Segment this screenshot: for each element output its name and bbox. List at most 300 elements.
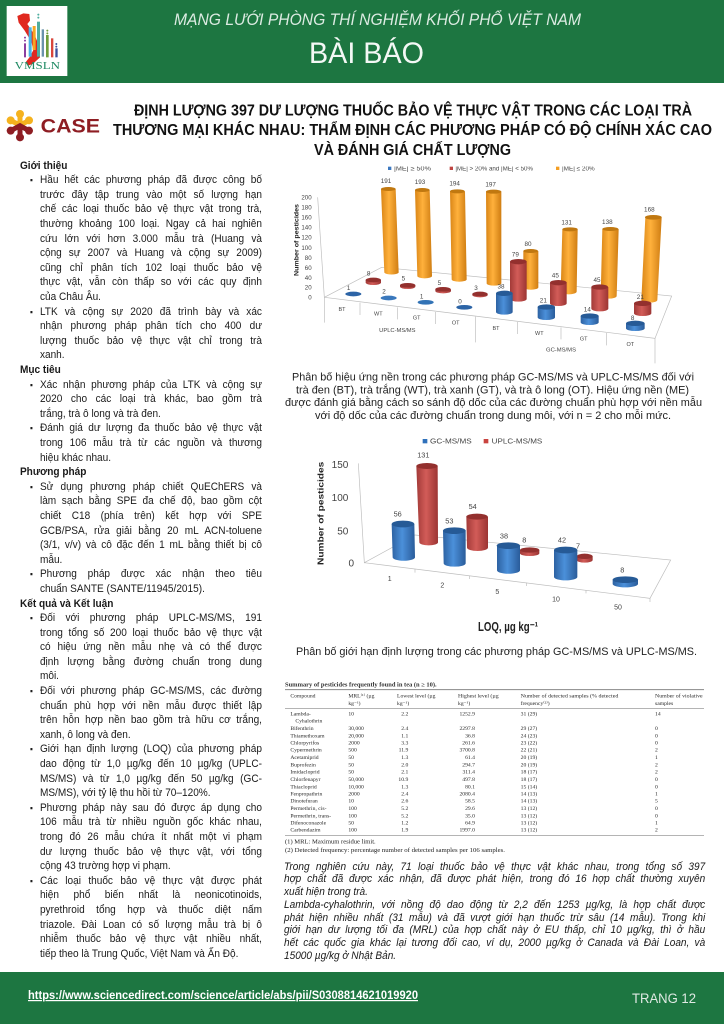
table: lowest level values: 1.3 [401, 755, 408, 761]
table: detected samples values: 18 (17) [521, 776, 537, 783]
table: compound names: Thiacloprid [290, 784, 317, 790]
table: detected samples values: 20 (19) [521, 762, 537, 769]
x axis labels [388, 576, 622, 611]
bullet: UPLC results: có hiệu ứng nền mẫu nhẹ và có thể được [40, 641, 262, 653]
caption: matrix effect chart: với độ dốc của các đường chuẩn trong dung môi, với n = 2 cho mỗi mức. [315, 409, 671, 422]
table header: kg⁻¹) [458, 700, 470, 707]
bullet: common pesticides: Các loại thuốc bảo vệ thực vật được phát [40, 875, 262, 887]
x axis labels: 50 [614, 604, 622, 611]
bullet: QuEChERS: chiết C18 (phía trên) kết hợp với SPE [40, 510, 262, 522]
footer band [0, 972, 724, 1024]
table: MRL values: 10,000 [348, 784, 364, 790]
table: lowest level values [398, 712, 408, 834]
caption: matrix effect chart: trà đen (BT), trà trắng (WT), trà xanh (GT), và trà ô long (OT). Hiệu ứng nền (ME) [296, 384, 689, 396]
y axis labels: 20 [305, 285, 312, 292]
table footnotes: (1) MRL: Maximum residue limit. [285, 839, 376, 846]
table: detected samples values: 23 (22) [521, 740, 537, 747]
table: MRL values: 10 [348, 712, 354, 718]
source link: https://www.sciencedirect.com/science/article/abs/pii/S0308814621019920 [28, 988, 418, 1002]
table: highest level values: 294.7 [462, 763, 475, 769]
orange cylinders [381, 187, 662, 303]
table: detected samples values: 22 (21) [521, 747, 537, 754]
table: detected samples values: 13 (12) [521, 812, 537, 819]
left column text: ▪ [30, 175, 33, 185]
left column text: ▪ [30, 482, 33, 492]
x axis labels: 1 [388, 576, 392, 583]
table: highest level values: 58.5 [465, 799, 475, 805]
data value labels: 21 [637, 294, 644, 301]
italic findings paragraph: giới hạn dư lượng tối đa (MRL) của hợp chất này ở EU thấp, chỉ 10 µg/kg, thì ở hầu [284, 924, 705, 936]
blue cylinders [345, 291, 645, 331]
data value labels: 3 [474, 285, 478, 292]
bullet: earlier methods: cộng sự 2007 và Huang và cộng sự 2009) [40, 247, 262, 259]
table: lowest level values: 2.4 [401, 792, 408, 798]
table: violative samples values: 2 [655, 770, 658, 776]
bullet: UPLC results: Đối với phương pháp UPLC-MS/MS, 191 [40, 612, 262, 624]
chart legend: |ME| ≤ 20% [562, 167, 595, 173]
table header: MRL⁽¹⁾ (µg [348, 693, 375, 700]
table: violative samples values: 0 [655, 813, 658, 819]
data value labels: 131 [561, 219, 572, 226]
icon: CASE logo: CASE [41, 117, 100, 138]
table: lowest level values: 2.6 [401, 799, 408, 805]
table: detected samples values: 14 (13) [521, 798, 537, 805]
article title [113, 101, 712, 159]
left column text: ▪ [30, 876, 33, 886]
data value labels: 7 [576, 541, 580, 550]
table: MRL values: 10 [348, 799, 354, 805]
x axis labels: GT [580, 337, 588, 343]
bullet: GC results: trên hỗn hợp nền bao gồm trà hữu cơ trắng, [40, 714, 262, 726]
left column text: ▪ [30, 380, 33, 390]
table: compound names: Permethrin, trans- [290, 813, 331, 819]
table: violative samples values: 0 [655, 726, 658, 732]
data value labels: 1 [420, 294, 424, 301]
bullet: earlier methods: thực vật, vẫn còn thấp so với các quy định [40, 276, 262, 288]
bullet: common pesticides [30, 875, 262, 960]
table: violative samples values: 1 [655, 792, 658, 798]
table: highest level values: 311.4 [462, 770, 475, 776]
y axis title: Number of pesticides [316, 461, 326, 565]
table header: kg⁻¹) [348, 700, 361, 707]
table: detected samples values: 13 (12) [521, 805, 537, 812]
bullet: UPLC results: trong tổng số 200 loại thuốc bảo vệ thực vật [40, 627, 262, 639]
heading: introduction: Giới thiệu [20, 160, 67, 172]
y axis labels: 50 [337, 526, 349, 537]
bullet: common pesticides: pyrethroid tổng hợp và thuốc diệt nấm [40, 904, 262, 916]
table: highest level values: 80.1 [465, 784, 475, 790]
x axis labels: OT [627, 342, 635, 348]
data value labels: 45 [552, 272, 559, 279]
table header: frequency⁽²⁾) [521, 700, 550, 707]
caption: matrix effect chart: Phân bố hiệu ứng nền trong các phương pháp GC-MS/MS và UPLC-MS/MS đối với [292, 372, 694, 384]
data value labels: 5 [438, 280, 442, 287]
bullet: 106 samples: trong đó 26 mẫu chứa ít nhất một vi phạm [40, 831, 262, 843]
y axis labels: 140 [301, 224, 312, 231]
bullet: validate method: 2020 cho các loại trà khác, bao gồm trà [40, 393, 262, 405]
table: violative samples values: 14 [655, 712, 661, 718]
bullet: common pesticides: tiếp theo là Trung Quốc, Việt Nam và Ấn Độ. [40, 948, 238, 960]
table: MRL values: 20,000 [348, 733, 364, 739]
table: MRL values: 2000 [348, 741, 360, 747]
bullet: evaluate residues [30, 422, 262, 464]
table: detected samples values: 13 (12) [521, 827, 537, 834]
table: lowest level values: 10.9 [398, 777, 408, 783]
bullet: QuEChERS: làm sạch bằng SPE đa chế độ, bao gồm cột [40, 495, 262, 507]
table: highest level values: 2080.4 [459, 792, 475, 798]
table: compound names: Imidacloprid [290, 770, 320, 776]
table: detected samples values: 15 (14) [521, 783, 537, 790]
table: MRL values [348, 712, 364, 834]
bullet: LOQ [30, 743, 262, 799]
table: compound names: Thiamethoxam [290, 733, 325, 739]
data value labels: 197 [485, 181, 496, 188]
table: lowest level values: 11.9 [399, 748, 408, 754]
data value labels: 8 [522, 535, 526, 544]
bullet: LTK 2020: xanh. [40, 349, 65, 361]
chart legend: |ME| ≥ 50% [394, 167, 432, 173]
table: violative samples values: 0 [655, 806, 658, 812]
bullet: earlier methods [30, 174, 262, 303]
x axis labels: GT [413, 316, 421, 322]
table: compound names: Difenoconazole [290, 819, 327, 826]
table: violative samples values: 2 [655, 763, 658, 769]
header title: BÀI BÁO [309, 37, 424, 70]
bullet: common pesticides: triazole. Đài Loan có số lượng mẫu trà bị ô [40, 919, 262, 931]
table: lowest level values: 2.4 [401, 726, 408, 732]
heading: objectives: Mục tiêu [20, 364, 61, 376]
data value labels: 14 [584, 306, 591, 313]
table header: kg⁻¹) [397, 700, 409, 707]
chart axes and floor [318, 197, 672, 363]
left column text: ▪ [30, 307, 33, 317]
table: highest level values [459, 712, 475, 834]
bullet: GC results: Đối với phương pháp GC-MS/MS, các đường [40, 685, 262, 697]
chart axes and floor [358, 463, 671, 602]
bullet: QuEChERS [30, 481, 262, 566]
bullet: UPLC results: môi. [40, 670, 59, 682]
bullet: earlier methods: cũng chỉ phân tích 102 loại thuốc bảo vệ [40, 262, 262, 274]
data value labels: 56 [394, 509, 402, 518]
italic findings paragraph [284, 861, 706, 962]
bullet: common pesticides: nhiễm thuốc bảo vệ thực vật nhiều nhất, [40, 933, 262, 945]
table: MRL values: 50 [348, 763, 354, 769]
table header: Lowest level (µg [397, 693, 436, 700]
table: MRL values: 50 [348, 770, 354, 776]
table: lowest level values: 5.2 [401, 806, 408, 812]
bullet: LTK 2020: lượng thuốc bảo vệ thực vật chỉ trong trà [40, 335, 262, 347]
header band [0, 0, 724, 83]
left column text: ▪ [30, 423, 33, 433]
bullet: UPLC results: định lượng bằng đường chuẩn trong dung [40, 656, 262, 668]
x axis labels: WT [374, 311, 383, 317]
table: highest level values: 2297.8 [459, 726, 475, 732]
bullet: evaluate residues: Đánh giá dư lượng đa thuốc bảo vệ thực vật [40, 422, 262, 434]
data value labels: 1 [347, 285, 351, 292]
bullet: earlier methods: cứu lớn với hơn 3.000 mẫu trà (Huang và [40, 233, 262, 245]
data value labels: 45 [593, 277, 601, 284]
bullet: LTK 2020: LTK và cộng sự 2020 đã trình bày và xác [40, 306, 262, 318]
table header: Compound [290, 694, 316, 700]
table: compound names: Buprofezin [290, 762, 316, 769]
table: compound names: Lambda- [290, 712, 311, 718]
bullet: LOQ: MS/MS), với tỷ lệ thu hồi từ 70–120%. [40, 787, 211, 799]
data value labels: 54 [469, 502, 477, 511]
y axis labels: 160 [301, 214, 312, 221]
bullet: SANTE [30, 568, 262, 595]
bullet: earlier methods: trước đây tập trung vào một số lượng hạn [40, 189, 262, 201]
table: compound names: Chlorfenapyr [290, 776, 321, 783]
table: compound names [290, 712, 331, 834]
table: detected samples values: 18 (17) [521, 769, 537, 776]
table: detected samples values [521, 711, 537, 834]
bullet: 106 samples: cộng 43 trường hợp vi phạm. [40, 860, 171, 872]
table: compound names: Cyhalothrin [295, 719, 323, 725]
table: compound names: Acetamiprid [290, 755, 319, 761]
table: violative samples values: 0 [655, 784, 658, 790]
table header: Highest level (µg [458, 693, 499, 700]
italic findings paragraph: Trong nghiên cứu này, 71 loại thuốc bảo vệ thực vật khác nhau, trong tổng số 397 [284, 861, 705, 873]
bullet: QuEChERS: (3/1, v/v) và cô đặc đến 1 mL bằng thiết bị cô [40, 539, 262, 551]
table: highest level values: 64.9 [465, 820, 475, 826]
bullet: validate method [30, 379, 262, 420]
table: MRL values: 100 [348, 813, 357, 819]
table: highest level values: 61.4 [465, 755, 475, 761]
data value labels: 80 [524, 241, 532, 248]
data value labels: 79 [512, 251, 519, 258]
data value labels: 8 [631, 315, 635, 322]
table: detected samples values: 24 (23) [521, 732, 537, 739]
y axis title: Number of pesticides [293, 203, 300, 276]
bullet: QuEChERS: mẫu. [40, 554, 62, 566]
icon: VMSLN logo: VMSLN [15, 61, 61, 72]
x axis labels: GC-MS/MS [546, 348, 576, 354]
left column text: ▪ [30, 569, 33, 579]
data value labels: 21 [540, 298, 547, 305]
table: lowest level values: 1.9 [401, 828, 408, 834]
x axis labels: BT [338, 307, 346, 313]
bullet: SANTE: Phương pháp được xác nhận theo tiêu [40, 568, 262, 580]
data value labels [347, 178, 655, 322]
y axis labels: 40 [305, 275, 312, 282]
table: violative samples values: 5 [655, 799, 658, 805]
table: lowest level values: 5.2 [401, 813, 408, 819]
table: lowest level values: 3.3 [401, 741, 408, 747]
table: lowest level values: 2.1 [401, 770, 408, 776]
table: MRL values: 500 [348, 748, 357, 754]
chart: matrix effect 3D cylinders [293, 166, 672, 364]
left column text [20, 160, 262, 960]
caption: LOQ chart: Phân bố giới hạn định lượng trong các phương pháp GC-MS/MS và UPLC-MS/MS. [296, 646, 697, 658]
table: compound names: Cypermethrin [290, 748, 322, 754]
chart legend: UPLC-MS/MS [492, 437, 542, 446]
y axis labels: 120 [301, 235, 312, 242]
x axis labels [338, 307, 635, 354]
x axis labels: BT [492, 326, 500, 332]
header organisation name: MẠNG LƯỚI PHÒNG THÍ NGHIỆM KHỐI PHỔ VIỆT NAM [174, 10, 581, 29]
x axis labels: 2 [440, 583, 444, 590]
bullet: evaluate residues: trong 106 mẫu trà từ các nguồn và thương [40, 437, 262, 449]
table: MRL values: 50 [348, 755, 354, 761]
bullet: evaluate residues: hiệu khác nhau. [40, 452, 111, 464]
page number: TRANG 12 [632, 991, 696, 1006]
bullet: 106 samples: Phương pháp này sau đó được áp dụng cho [40, 802, 262, 814]
heading: results and conclusion: Kết quả và Kết luận [20, 598, 113, 610]
y axis labels: 80 [305, 255, 312, 262]
y axis labels: 0 [348, 558, 354, 569]
table: highest level values: 35.0 [465, 813, 475, 819]
table: MRL values: 100 [348, 828, 357, 834]
y axis labels [301, 194, 312, 301]
table: violative samples values [655, 712, 661, 834]
table rules [285, 690, 704, 835]
table: highest level values: 1252.9 [459, 712, 475, 718]
bullet: UPLC results [30, 612, 262, 682]
table: violative samples values: 0 [655, 777, 658, 783]
data value labels: 8 [620, 565, 624, 574]
table: violative samples values: 1 [655, 820, 658, 826]
y axis labels: 60 [305, 265, 312, 272]
data value labels: 131 [417, 451, 429, 460]
y axis labels: 150 [332, 460, 349, 471]
bullet: common pesticides: hiện phổ biến nhất là neonicotinoids, [40, 889, 262, 901]
bullet: validate method: Xác nhận phương pháp của LTK và cộng sự [40, 379, 262, 391]
chart legend: |ME| > 20% and |ME| < 50% [455, 167, 534, 173]
heading: method: Phương pháp [20, 466, 86, 478]
icon: CASE logo [6, 110, 100, 142]
x axis labels: UPLC-MS/MS [379, 328, 416, 334]
italic findings paragraph: Lambda-cyhalothrin, với nồng độ dao động từ 2,2 đến 1253 µg/kg, là hợp chất được [284, 899, 705, 911]
bullet: GC results: xanh, ô long và đen. [40, 729, 131, 741]
table header: Number of violative [655, 693, 703, 700]
data value labels: 191 [381, 178, 392, 185]
table: compound names: Bifenthrin [290, 725, 314, 732]
bullet: 106 samples [30, 802, 262, 872]
table: highest level values: 497.8 [462, 777, 475, 783]
table: lowest level values: 1.2 [401, 820, 408, 826]
table: pesticides frequently found [285, 682, 704, 854]
table: highest level values: 261.6 [462, 741, 475, 747]
bullet: QuEChERS: Sử dụng phương pháp chiết QuEChERS và [40, 481, 262, 493]
y axis labels: 100 [301, 245, 312, 252]
table: detected samples values: 13 (12) [521, 819, 537, 826]
data value labels [394, 451, 624, 574]
data value labels: 2 [382, 288, 386, 295]
y axis labels: 0 [308, 294, 312, 301]
left column text: ▪ [30, 686, 33, 696]
table: violative samples values: 2 [655, 748, 658, 754]
table: MRL values: 30,000 [348, 726, 364, 732]
table: compound names: Dinotefuran [290, 798, 318, 805]
bullet: earlier methods: chế các loại thuốc bảo vệ thực vật trong trà, [40, 203, 262, 215]
bullet: LOQ: dao động từ 1,0 µg/kg đến 10 µg/kg (UPLC- [40, 758, 262, 770]
x axis title: LOQ: LOQ, µg kg⁻¹ [478, 620, 538, 634]
left column text: ▪ [30, 744, 33, 754]
data value labels: 5 [402, 276, 406, 283]
y axis labels [332, 460, 354, 569]
table: MRL values: 50 [348, 820, 354, 826]
table footnotes: (2) Detected frequency: percentage number of detected samples per 106 samples. [285, 847, 506, 854]
table: MRL values: 50,000 [348, 777, 364, 783]
data value labels: 193 [415, 179, 426, 186]
left column text: ▪ [30, 613, 33, 623]
table title: Summary of pesticides frequently found in tea (n ≥ 10). [285, 682, 437, 689]
bullet: earlier methods: thường khoảng 100 loại. Ngay cả hai nghiên [40, 218, 262, 230]
italic findings paragraph: 15000 µg/kg ở Nhật Bản. [284, 950, 396, 962]
bullet: earlier methods: của Châu Âu. [40, 291, 101, 303]
table: compound names: Carbendazim [290, 828, 321, 834]
table: violative samples values: 1 [655, 755, 658, 761]
left column text: ▪ [30, 803, 33, 813]
y axis labels: 180 [301, 204, 312, 211]
table: compound names: Fenpropathrin [290, 792, 323, 798]
table: compound names: Permethrin, cis- [290, 806, 327, 812]
bullet: SANTE: chuẩn SANTE (SANTE/11945/2015). [40, 583, 205, 595]
red cylinders [366, 259, 651, 316]
table: highest level values: 1997.0 [459, 828, 475, 834]
chart legend [423, 437, 542, 446]
y axis labels: 200 [301, 194, 312, 201]
table: highest level values: 29.6 [465, 806, 475, 812]
data value labels: 38 [497, 284, 505, 291]
table: detected samples values: 14 (13) [521, 791, 537, 798]
bullet: QuEChERS: GCB/PSA, rửa giải bằng 20 mL ACN-toluene [40, 525, 262, 537]
table: MRL values: 100 [348, 806, 357, 812]
bullet: LOQ: Giới hạn định lượng (LOQ) của phương pháp [40, 743, 262, 755]
table: compound names: Chlorpyrifos [290, 740, 319, 747]
bullet: validate method: trắng, trà ô long và trà đen. [40, 408, 161, 420]
bullet: LTK 2020: nhận phương pháp phân tích cho 400 dư [40, 320, 262, 332]
bullet: 106 samples: dư lượng thuốc bảo vệ thực vật, với tổng [40, 846, 262, 858]
table header: Number of detected samples (% detected [521, 693, 619, 700]
table: lowest level values: 2.2 [401, 712, 408, 718]
x axis labels: OT [452, 320, 460, 326]
italic findings paragraph: hết các quốc gia khác lại tương đối cao, ví dụ, 2000 µg/kg ở Canada và Đài Loan, và [284, 937, 705, 949]
bullet: 106 samples: 106 mẫu trà từ nhiều nguồn gốc khác nhau, [40, 816, 262, 828]
blue cylinders [392, 521, 638, 587]
chart legend [388, 167, 595, 173]
data value labels: 194 [449, 181, 460, 188]
table: violative samples values: 0 [655, 733, 658, 739]
x axis labels: 5 [495, 589, 499, 596]
chart: LOQ distribution 3D cylinders [316, 437, 671, 611]
table: detected samples values: 31 (29) [521, 711, 537, 718]
table: detected samples values: 20 (19) [521, 754, 537, 761]
article title: VÀ ĐÁNH GIÁ CHẤT LƯỢNG [314, 142, 511, 159]
data value labels: 38 [500, 532, 508, 541]
italic findings paragraph: xuất hiện trong trà. [284, 886, 368, 898]
bullet: earlier methods: Hầu hết các phương pháp đã được công bố [40, 174, 262, 186]
data value labels: 0 [458, 299, 462, 306]
table: lowest level values: 1.1 [401, 733, 408, 739]
table header [290, 693, 703, 707]
table: violative samples values: 0 [655, 741, 658, 747]
icon: VMSLN logo [6, 6, 68, 76]
table: highest level values: 3700.8 [459, 748, 475, 754]
data value labels: 138 [602, 219, 613, 226]
table: lowest level values: 1.3 [401, 784, 408, 790]
bullet: LTK 2020 [30, 306, 262, 361]
caption: matrix effect chart: được đánh giá bằng cách so sánh độ dốc của các đường chuẩn phù hợp với nền mẫu [285, 396, 702, 409]
table: highest level values: 36.8 [465, 733, 475, 739]
article title: ĐỊNH LƯỢNG 397 DƯ LƯỢNG THUỐC BẢO VỆ THỰC VẬT TRONG CÁC LOẠI TRÀ [134, 102, 692, 120]
table: detected samples values: 29 (27) [521, 725, 537, 732]
caption: matrix effect chart [285, 372, 702, 422]
table header: samples [655, 701, 673, 707]
x axis labels: WT [535, 331, 544, 337]
table footnotes [285, 839, 506, 854]
y axis labels: 100 [332, 493, 349, 504]
